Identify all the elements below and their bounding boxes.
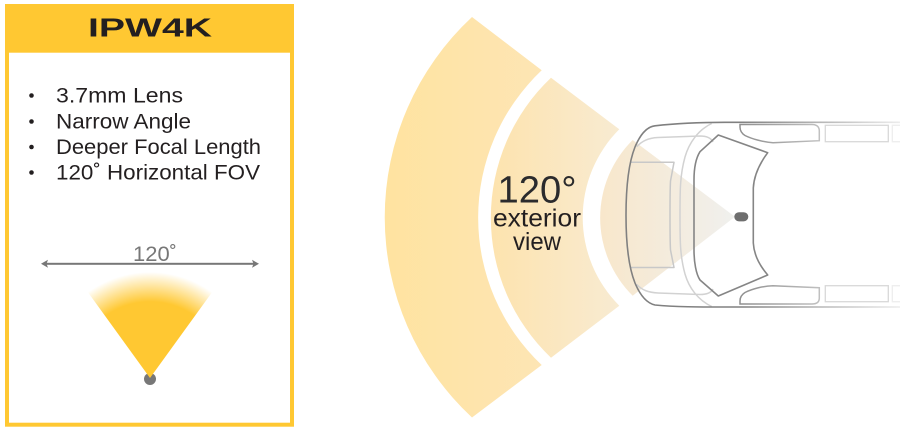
text block: feature list	[29, 84, 261, 184]
icon: mounted camera	[734, 212, 748, 221]
icon: field of view fan	[78, 255, 222, 378]
car top window	[740, 124, 819, 143]
heading: IPW4K: IPW4K	[88, 15, 213, 43]
panel: IPW4K specification card	[5, 4, 294, 425]
illustration: car top view	[626, 122, 900, 307]
callout: 120 degree exterior view	[493, 170, 581, 256]
car bottom window	[740, 286, 819, 304]
header band	[5, 4, 294, 53]
arrow: horizontal field of view span	[41, 260, 259, 268]
callout: 120 degree exterior view: exterior	[493, 205, 581, 233]
chart: outer view band	[385, 17, 542, 418]
text block: feature list: 3.7mm Lens	[56, 84, 183, 108]
car front light details	[630, 124, 713, 306]
text block: feature list: Deeper Focal Length	[56, 135, 261, 159]
label: 120 degrees: 120˚	[133, 242, 177, 266]
callout: 120 degree exterior view: 120°	[498, 170, 576, 212]
chart: inner view wedge	[600, 140, 735, 296]
icon: camera dot	[144, 373, 156, 385]
callout: 120 degree exterior view: view	[513, 228, 562, 256]
text block: feature list: Narrow Angle	[56, 110, 191, 134]
car hood	[694, 135, 768, 296]
car body outline	[626, 122, 900, 307]
text block: feature list: 120˚ Horizontal FOV	[56, 160, 261, 184]
chart: middle view band	[491, 78, 619, 358]
car side panels	[825, 125, 900, 302]
